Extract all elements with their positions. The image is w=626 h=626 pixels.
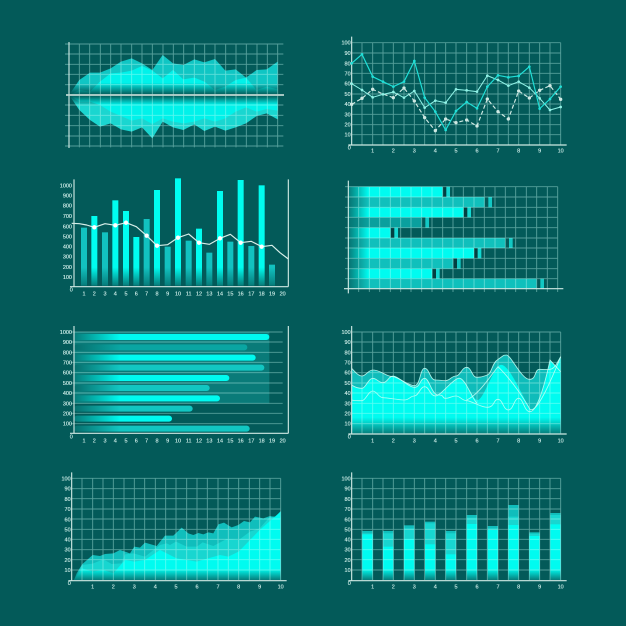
grid [352, 43, 561, 145]
x axis labels: 19 [269, 291, 275, 297]
y axis labels: 20 [345, 123, 351, 129]
chart: mirrored area chart [65, 42, 284, 148]
x axis labels: 10 [278, 585, 284, 591]
x axis labels: 2 [93, 438, 96, 444]
y axis labels: 70 [65, 507, 71, 513]
x axis labels: 10 [558, 439, 564, 445]
y axis labels: 20 [345, 558, 351, 564]
grid [345, 187, 558, 292]
y axis labels: 20 [65, 558, 71, 564]
x axis labels: 0 [348, 581, 351, 587]
x axis labels: 7 [216, 585, 220, 591]
x axis labels: 5 [454, 439, 458, 445]
grid [352, 332, 561, 433]
axes [344, 181, 563, 293]
x axis labels: 5 [454, 149, 458, 155]
x axis labels: 6 [135, 438, 138, 444]
x axis labels: 20 [280, 438, 286, 444]
x axis labels: 15 [227, 438, 233, 444]
y axis labels: 400 [63, 391, 72, 397]
y axis labels: 700 [63, 360, 72, 366]
chart: rounded horizontal bars [60, 326, 288, 444]
front bar layer [362, 524, 561, 580]
x axis labels: 4 [114, 291, 117, 297]
x axis labels: 0 [348, 145, 351, 151]
y axis labels [60, 183, 72, 281]
y axis labels: 30 [345, 548, 351, 554]
chart: smooth area chart [342, 326, 567, 445]
y axis labels: 50 [345, 527, 351, 533]
y axis labels: 1000 [60, 330, 72, 336]
y axis labels: 800 [63, 350, 72, 356]
highlight panel [74, 332, 269, 403]
y axis labels: 60 [345, 517, 351, 523]
x axis labels: 4 [154, 585, 157, 591]
x axis labels: 8 [155, 438, 159, 444]
bottom back area [69, 95, 278, 138]
x axis labels: 4 [114, 438, 117, 444]
y axis labels: 10 [65, 568, 71, 574]
y axis labels: 500 [63, 381, 72, 387]
x axis labels: 1 [371, 585, 374, 591]
axes [70, 179, 288, 287]
x axis labels: 1 [82, 291, 86, 297]
x axis labels: 15 [227, 291, 233, 297]
x axis labels: 16 [238, 291, 244, 297]
x axis labels: 1 [82, 438, 86, 444]
x axis labels: 4 [434, 585, 437, 591]
y axis labels: 400 [63, 245, 72, 251]
x axis labels: 7 [145, 291, 148, 297]
y axis labels: 40 [345, 538, 351, 544]
x axis labels [348, 145, 564, 155]
y axis labels [342, 330, 351, 428]
y axis labels: 40 [345, 391, 351, 397]
x axis labels: 9 [538, 149, 541, 155]
axes [348, 37, 567, 145]
x axis labels: 9 [538, 585, 541, 591]
y axis labels: 60 [345, 82, 351, 88]
x axis labels: 8 [155, 291, 159, 297]
back area [352, 355, 561, 434]
x axis labels: 10 [175, 438, 181, 444]
x axis labels: 9 [166, 438, 169, 444]
x axis labels: 5 [174, 585, 178, 591]
middle bar layer [362, 515, 561, 580]
x axis labels: 9 [538, 439, 541, 445]
y axis labels: 900 [63, 194, 72, 200]
y axis labels: 60 [345, 371, 351, 377]
y axis labels: 800 [63, 204, 72, 210]
y axis labels: 40 [345, 102, 351, 108]
axes [348, 472, 567, 581]
x axis labels [348, 435, 564, 445]
y axis labels: 100 [342, 477, 351, 483]
x axis labels: 0 [70, 287, 73, 293]
y axis labels: 10 [345, 422, 351, 428]
x axis labels: 9 [166, 291, 169, 297]
chart: layered vertical bars [342, 472, 567, 591]
y axis labels [342, 41, 351, 139]
x axis labels: 12 [196, 291, 202, 297]
bottom front area [69, 95, 278, 124]
x axis labels: 17 [248, 438, 254, 444]
bars [74, 334, 269, 432]
x axis labels: 7 [496, 585, 500, 591]
x axis labels: 1 [371, 149, 374, 155]
y axis labels: 100 [62, 477, 71, 483]
bars [348, 187, 537, 289]
x axis labels: 13 [206, 291, 212, 297]
x axis labels: 3 [413, 439, 416, 445]
grid [352, 478, 561, 580]
back bar layer [362, 505, 561, 580]
x axis labels [348, 581, 564, 591]
x axis labels: 2 [93, 291, 96, 297]
y axis labels: 300 [63, 401, 72, 407]
y axis labels: 80 [345, 497, 351, 503]
x axis labels: 4 [434, 149, 437, 155]
y axis labels: 90 [345, 51, 351, 57]
y axis labels: 100 [63, 275, 72, 281]
x axis labels: 10 [558, 585, 564, 591]
horizontal guides [71, 332, 283, 424]
chart: line chart [342, 37, 567, 155]
x axis labels: 3 [103, 291, 107, 297]
x axis labels: 2 [112, 585, 115, 591]
x axis labels: 17 [248, 291, 254, 297]
y axis labels: 80 [345, 61, 351, 67]
x axis labels: 7 [145, 438, 148, 444]
dashed white series [350, 84, 562, 132]
y axis labels: 90 [345, 340, 351, 346]
x axis labels: 3 [413, 149, 416, 155]
x axis labels: 16 [238, 438, 244, 444]
cyan series [350, 53, 562, 131]
x axis labels: 5 [454, 585, 458, 591]
y axis labels: 1000 [60, 183, 72, 189]
y axis labels: 80 [65, 497, 71, 503]
x axis labels: 8 [237, 585, 240, 591]
x axis labels: 2 [392, 149, 395, 155]
x axis labels: 6 [135, 291, 138, 297]
x axis labels: 1 [91, 585, 94, 591]
bar end markers [391, 187, 544, 289]
axes [70, 326, 288, 433]
x axis labels: 7 [496, 439, 500, 445]
x axis labels: 5 [124, 291, 128, 297]
y axis labels: 80 [345, 350, 351, 356]
x axis labels [70, 287, 286, 297]
middle area [74, 517, 281, 580]
y axis labels: 100 [63, 422, 72, 428]
x axis labels: 19 [269, 438, 275, 444]
x axis labels: 14 [217, 438, 223, 444]
x axis labels: 8 [517, 149, 520, 155]
x axis labels: 2 [392, 585, 395, 591]
grid [65, 44, 283, 147]
y axis labels: 500 [63, 234, 72, 240]
y axis labels: 90 [65, 487, 71, 493]
x axis labels: 8 [517, 439, 520, 445]
x axis labels: 11 [186, 291, 192, 297]
white curves [352, 355, 561, 412]
y axis labels: 600 [63, 224, 72, 230]
x axis labels: 3 [133, 585, 136, 591]
y axis labels: 30 [345, 112, 351, 118]
y axis labels: 30 [65, 548, 71, 554]
y axis labels: 100 [342, 41, 351, 47]
x axis labels: 1 [371, 439, 374, 445]
y axis labels: 100 [342, 330, 351, 336]
pale cyan series [350, 74, 562, 111]
x axis labels: 12 [196, 438, 202, 444]
y axis labels: 50 [345, 381, 351, 387]
x axis labels: 10 [175, 291, 181, 297]
x axis labels: 3 [413, 585, 416, 591]
y axis labels: 20 [345, 411, 351, 417]
x axis labels: 18 [259, 438, 265, 444]
y axis labels: 300 [63, 255, 72, 261]
y axis labels [62, 477, 71, 574]
y axis labels: 70 [345, 360, 351, 366]
y axis labels: 70 [345, 507, 351, 513]
y axis labels: 70 [345, 71, 351, 77]
y axis labels: 600 [63, 371, 72, 377]
x axis labels: 6 [195, 585, 199, 591]
y axis labels: 30 [345, 401, 351, 407]
chart: bars with trend line [60, 178, 288, 297]
axes [67, 42, 71, 148]
chart: horizontal stacked bars on grid [344, 181, 563, 293]
bars [81, 178, 275, 286]
middle bright area [352, 360, 561, 434]
x axis labels: 13 [206, 438, 212, 444]
axes [68, 472, 287, 581]
x axis labels: 20 [280, 291, 286, 297]
front area [74, 512, 281, 580]
y axis labels [342, 477, 351, 574]
x axis labels: 4 [434, 439, 437, 445]
top front area [69, 66, 278, 95]
y axis labels: 200 [63, 411, 72, 417]
y axis labels: 50 [65, 527, 71, 533]
top back area [69, 55, 278, 95]
y axis labels: 900 [63, 340, 72, 346]
y axis labels: 200 [63, 265, 72, 271]
x axis labels: 9 [258, 585, 261, 591]
y axis labels: 90 [345, 487, 351, 493]
x axis labels [68, 581, 284, 591]
x axis labels: 2 [392, 439, 395, 445]
x axis labels: 6 [475, 439, 479, 445]
x axis labels: 0 [68, 581, 71, 587]
x axis labels: 5 [124, 438, 128, 444]
x axis labels: 0 [70, 434, 73, 440]
y axis labels: 50 [345, 92, 351, 98]
y axis labels [60, 330, 72, 428]
grid [72, 478, 281, 580]
axes [348, 326, 567, 434]
chart: layered rising area chart [62, 472, 287, 591]
back area [74, 511, 281, 580]
y axis labels: 10 [345, 133, 351, 139]
y axis labels: 10 [345, 568, 351, 574]
y axis labels: 60 [65, 517, 71, 523]
x axis labels: 8 [517, 585, 520, 591]
x axis labels: 14 [217, 291, 223, 297]
x axis labels: 3 [103, 438, 107, 444]
y axis labels: 700 [63, 214, 72, 220]
x axis labels: 10 [558, 149, 564, 155]
x axis labels: 7 [496, 149, 500, 155]
x axis labels: 6 [475, 585, 479, 591]
x axis labels: 6 [475, 149, 479, 155]
x axis labels [70, 434, 286, 444]
y axis labels: 40 [65, 538, 71, 544]
x axis labels: 18 [259, 291, 265, 297]
front bright area [352, 357, 561, 434]
x axis labels: 11 [186, 438, 192, 444]
x axis labels: 0 [348, 435, 351, 441]
trend line [72, 220, 288, 259]
